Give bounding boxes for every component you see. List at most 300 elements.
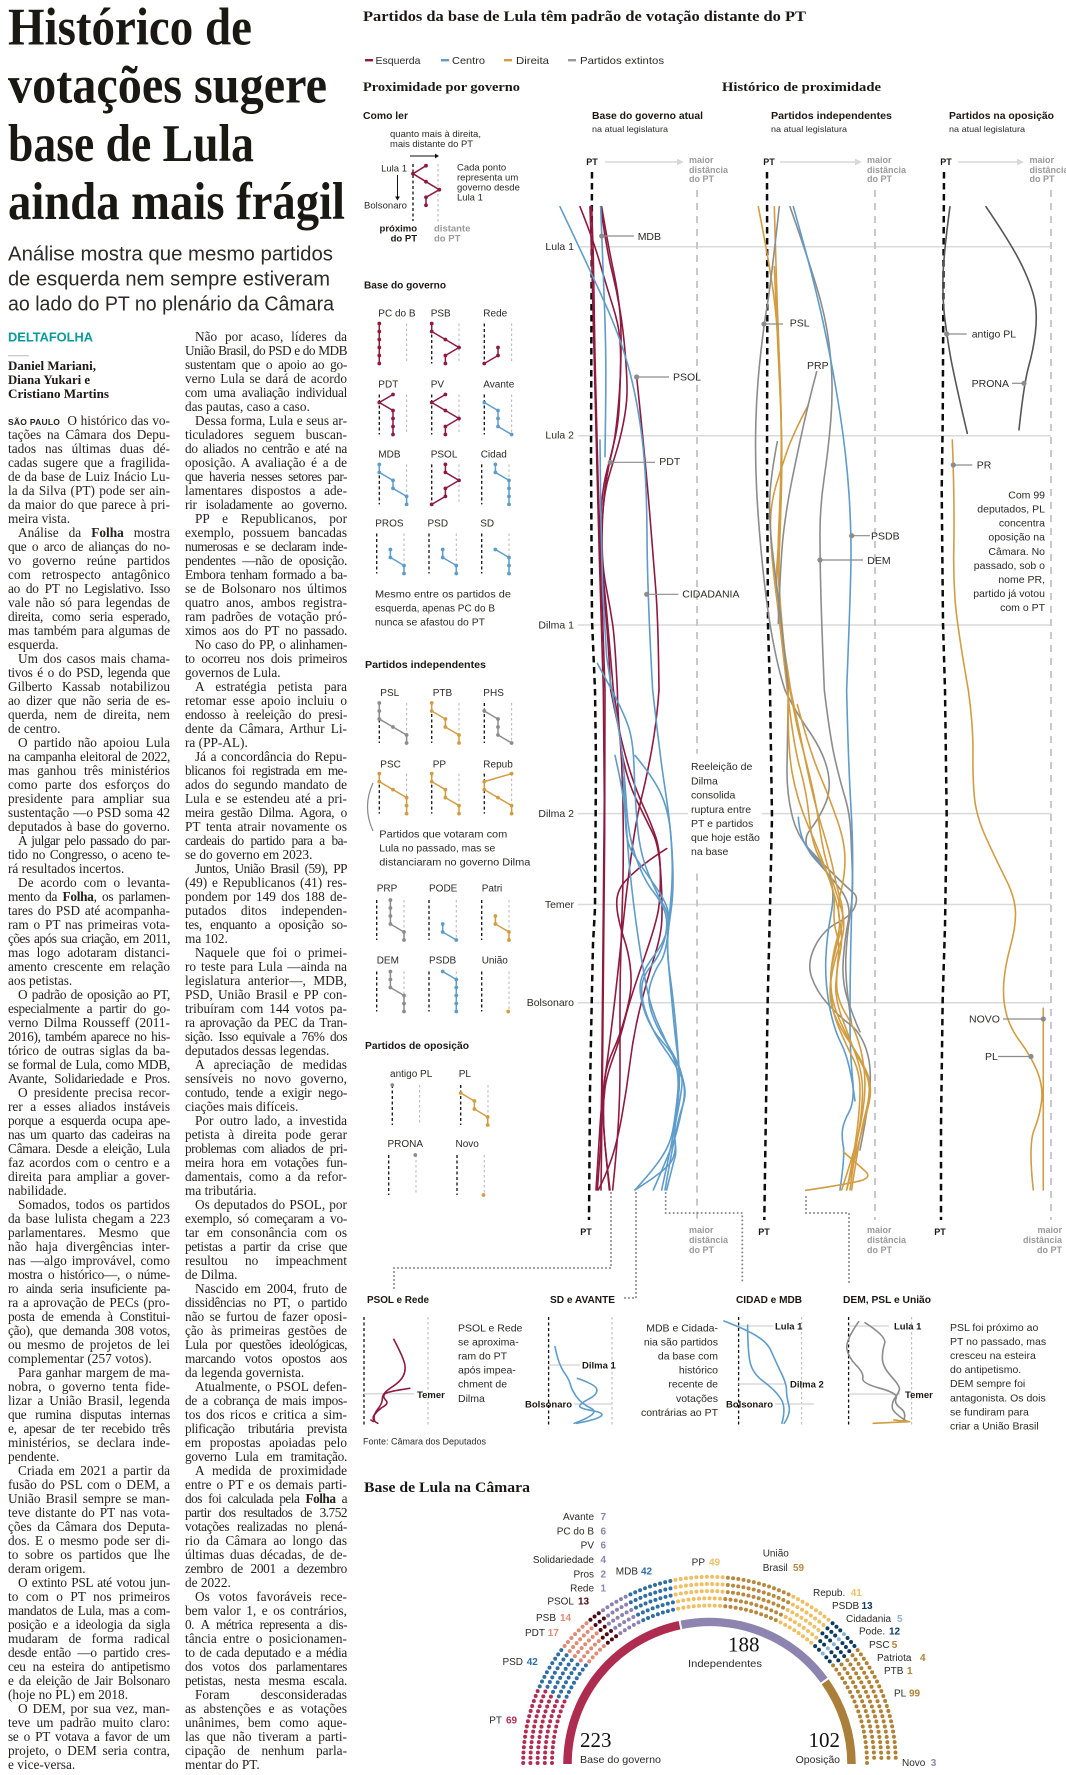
article text: column 2: exemplo, só começaram a vo-	[185, 1211, 347, 1226]
article text: column 1: De acordo com o levanta-	[18, 875, 170, 890]
article text: column 2: ma 102.	[185, 931, 228, 946]
detail panel: SD e AVANTE: votações	[676, 1393, 718, 1405]
article text: column 2: meira hora em votações fun-	[185, 1155, 347, 1170]
small multiple: PV	[431, 380, 459, 434]
article text: column 2: oposição. A avaliação é a de	[185, 455, 347, 470]
article text: column 1: como parte dos esforços do	[8, 777, 170, 792]
small multiple: PRP: PRP	[377, 884, 398, 894]
detail panel: DEM, PSL e União: criar a União Brasil	[950, 1420, 1039, 1432]
small multiple: Repub	[483, 760, 513, 814]
heading: Partidos independentes: Partidos independentes	[365, 659, 486, 671]
article text: column 1: mas também para algumas de	[8, 623, 170, 638]
small multiple: PRONA	[388, 1139, 423, 1195]
parliament: party labels: Cidadania	[846, 1614, 891, 1625]
parliament: party labels: PT	[489, 1716, 502, 1726]
article text: column 2: tância entre o posicionamen-	[185, 1631, 347, 1646]
annotation: Com 99 deputados: Câmara. No	[988, 546, 1045, 558]
article text: column 1: posta de emenda à Constitui-	[8, 1309, 170, 1324]
article text: column 2: votações realizadas no plená-	[185, 1519, 347, 1534]
small multiple: antigo PL: antigo PL	[390, 1069, 433, 1080]
article text: column 2: Dessa forma, Lula e seus ar-	[195, 413, 347, 428]
how to read diagram: representa um	[457, 172, 518, 184]
article text: column 1: posição e a ideologia da sigla	[8, 1617, 170, 1632]
article text: column 2: Não por acaso, líderes da	[195, 329, 347, 344]
article text: column 2: Atualmente, o PSOL defen-	[195, 1379, 347, 1394]
small multiple: Avante: Avante	[483, 380, 515, 390]
small multiple: PSDB	[429, 956, 457, 1012]
article text: column 2: tar em consonância com os	[185, 1225, 347, 1240]
article text: column 1	[8, 413, 170, 1772]
parliament: party labels: 5	[892, 1640, 898, 1651]
small multiple: PDT	[378, 380, 407, 434]
parliament: party labels: PSOL	[547, 1596, 574, 1608]
detail panel: PSOL e Rede: ram do PT	[458, 1350, 508, 1362]
detail panel: DEM, PSL e União: cresceu na esteira	[950, 1350, 1036, 1362]
detail panel: PSOL e Rede: PSOL e Rede	[458, 1322, 523, 1334]
article text: column 1: Para ganhar margem de ma-	[18, 1365, 170, 1380]
article text: column 1: tórico de outras siglas da ba-	[8, 1043, 170, 1058]
detail panel: DEM, PSL e União: do antipetismo.	[950, 1364, 1021, 1376]
article text: column 1: Análise da Folha mostra	[18, 525, 170, 540]
how to read diagram: quanto mais à direita,	[390, 129, 481, 140]
detail panel: PSOL e Rede: após impea-	[458, 1364, 516, 1376]
how to read diagram: mais distante do PT	[390, 139, 473, 150]
article text: column 2: dos foi calculada pela Folha a	[185, 1491, 347, 1506]
chart axes: PT and maior distância: distância	[689, 1235, 729, 1245]
article text: column 1: ou mesmo de projetos de lei	[8, 1337, 170, 1352]
article text: column 1: sustentação —o PSD soma 42	[8, 805, 170, 820]
article text: column 1: O DEM, por sua vez, man-	[18, 1701, 170, 1716]
article text: column 2: União Brasil, do PSD e do MDB	[185, 343, 347, 358]
article text: column 2: ção às primeiras gestões de	[185, 1323, 347, 1338]
detail panel: PSOL e Rede: Dilma	[458, 1393, 485, 1405]
article text: column 2: legislatura anterior—, MDB,	[185, 973, 347, 988]
parliament: party labels: 14	[560, 1613, 572, 1624]
parliament: party labels: 12	[889, 1626, 901, 1638]
article text: column 2: (49) e Republicanos (41) res-	[185, 875, 347, 890]
article text: column 1: vale não só para legendas de	[8, 595, 170, 610]
how to read diagram: Como ler	[363, 110, 408, 122]
article text: column 2: exemplo, possuem bancadas	[185, 525, 347, 540]
how to read diagram: governo desde	[457, 182, 520, 194]
article text: column 2: Lula e se estendeu até a pri-	[185, 791, 347, 806]
chart axes: PT and maior distância	[580, 155, 1066, 1255]
small multiple: PRONA: PRONA	[388, 1139, 423, 1150]
article text: column 1: da base lulista chegam a 223	[8, 1211, 170, 1226]
article text: column 1: ceu na esteira do antipetismo	[8, 1659, 170, 1674]
detail panel: SD e AVANTE: da base com	[658, 1350, 718, 1362]
parliament: party labels: 7	[600, 1512, 606, 1523]
parliament: coalition arcs	[568, 1622, 852, 1764]
parliament: party labels: PDT	[525, 1628, 545, 1639]
article text: column 1: complementar (257 votos).	[8, 1351, 152, 1366]
parliament: party labels	[489, 1512, 937, 1769]
column header: partidos independentes: na atual legislatura	[771, 124, 847, 134]
legend: Partidos extintos	[580, 55, 664, 67]
detail panel: DEM, PSL e União: Lula 1	[894, 1322, 922, 1332]
article text: column 1: to com o PT nos primeiros	[8, 1589, 170, 1604]
article text: column 2: quatro anos, ambos registra-	[185, 595, 347, 610]
parliament: party labels: 4	[920, 1653, 926, 1664]
annotation: Com 99 deputados: deputados, PL	[977, 504, 1045, 516]
parliament: party labels: 1	[907, 1666, 913, 1677]
chart axes: PT and maior distância: maior	[689, 1225, 714, 1235]
title: ainda mais frágil	[8, 173, 345, 231]
article text: column 2: unânimes, bem como aque-	[185, 1715, 347, 1730]
article text: column 2: deputados dessas legendas.	[185, 1043, 329, 1058]
parliament: party labels: PV	[581, 1540, 594, 1552]
chart axes: PT and maior distância: distância	[1023, 1235, 1063, 1245]
chart axes: PT and maior distância: do PT	[689, 174, 714, 184]
article text: column 2: ram padrões de votação pró-	[185, 609, 347, 624]
column header: base do governo atual: Base do governo atual	[592, 110, 703, 122]
detail panel: CIDAD e MDB: Lula 1	[775, 1322, 803, 1332]
article text: column 2: mentar do PT.	[185, 1757, 260, 1772]
detail panel: SD e AVANTE	[525, 1295, 719, 1425]
article text: column 1: Avante, Solidariedade e Pros.	[8, 1071, 170, 1086]
column header: base do governo atual: na atual legislatura	[592, 124, 668, 134]
title	[8, 0, 345, 231]
parliament: seat dots	[523, 1577, 896, 1763]
article text: column 1: mento da Folha, os parlamen-	[8, 889, 170, 904]
subtitle: ao lado do PT no plenário da Câmara	[8, 292, 335, 316]
subtitle: Análise mostra que mesmo partidos	[8, 242, 333, 266]
small multiple: PSL: PSL	[380, 688, 400, 699]
article text: column 2: to de cada deputado e a média	[185, 1645, 347, 1660]
chart axes: PT and maior distância: PT	[934, 1227, 946, 1237]
small multiple: PL: PL	[459, 1069, 471, 1080]
party callouts on lines: PDT	[659, 456, 681, 468]
party callouts on lines	[599, 231, 1046, 1063]
party callouts on lines: DEM	[867, 555, 891, 567]
article text: column 2: ro teste para Lula —ainda na	[185, 959, 347, 974]
small multiple: Rede	[483, 308, 512, 364]
parliament: party labels: Rede	[570, 1584, 594, 1594]
article text: column 1: deram origem.	[8, 1561, 86, 1576]
parliament: party labels: 59	[793, 1563, 805, 1574]
article text: column 2: plificação tributária prevista	[185, 1421, 347, 1436]
chart axes: PT and maior distância: maior	[867, 155, 892, 165]
article text: column 2: de a cobrança de mais impos-	[185, 1393, 347, 1408]
how to read diagram: distante	[434, 224, 470, 234]
column header: partidos independentes	[771, 110, 892, 134]
party callouts on lines: antigo PL	[972, 328, 1016, 340]
small multiple: Repub: Repub	[483, 760, 513, 771]
horizontal government lines and labels: Temer	[545, 899, 574, 911]
annotation: Reeleição de Dilma	[691, 761, 760, 858]
article text: column 1: Gilberto Kassab notabilizou	[8, 679, 170, 694]
article text: column 1: teve distante do PT nas vota-	[8, 1505, 170, 1520]
article text: column 2: últimas duas décadas, de de-	[185, 1547, 347, 1562]
party callouts on lines: PRP	[807, 360, 829, 372]
column header: partidos na oposição: na atual legislatura	[949, 124, 1025, 134]
detail panel: PSOL e Rede: chment de	[458, 1378, 507, 1390]
parliament: totals: 188	[728, 1632, 760, 1656]
party callouts on lines: NOVO	[969, 1014, 1000, 1026]
article text: column 1: de da base de Luiz Inácio Lu-	[8, 469, 170, 484]
article text: column 2: tos dos ricos e critica a sim-	[185, 1407, 347, 1422]
parliament: party labels: Brasil	[763, 1563, 788, 1574]
article text: column 1: SÃO PAULO O histórico das vo-	[8, 413, 170, 428]
article text: column 1: e, apesar de ter recebido três	[8, 1421, 170, 1436]
article text: column 2: entre o PT e os demais parti-	[185, 1477, 347, 1492]
legend: Esquerda	[376, 55, 421, 67]
detail panel: SD e AVANTE: recente de	[668, 1378, 718, 1390]
small multiple: PHS	[483, 688, 512, 743]
article text: column 1: O partido não apoiou Lula	[18, 735, 170, 750]
article text: column 2: problemas com aliados de pri-	[185, 1141, 347, 1156]
chart axes: PT and maior distância: do PT	[689, 1245, 714, 1255]
article text: column 1: faz acordos com o centro e a	[8, 1155, 170, 1170]
heading: Proximidade por governo: Proximidade por governo	[363, 79, 520, 94]
article text: column 2: putados ditos independen-	[185, 903, 347, 918]
parliament: party labels: 42	[527, 1657, 538, 1668]
article text: column 1: tados nas últimas duas dé-	[8, 441, 170, 456]
small multiple: União: União	[482, 956, 508, 966]
small multiple: MDB	[378, 449, 407, 504]
article text: column 1: ra a aprovação de PECs (pro-	[8, 1295, 170, 1310]
article text: column 2: contudo, tende a exigir nego-	[185, 1085, 347, 1100]
chart axes: PT and maior distância: do PT	[867, 1245, 892, 1255]
article text: column 1: rer a esses aliados instáveis	[8, 1099, 170, 1114]
article text: column 2: Juntos, União Brasil (59), PP	[195, 861, 347, 876]
small multiple: Novo	[456, 1139, 485, 1197]
article text: column 1: vo governo reúne partidos	[8, 553, 170, 568]
party callouts on lines: PR	[977, 460, 992, 472]
detail panel: DEM, PSL e União: PT no passado, mas	[950, 1336, 1046, 1348]
article text: column 1: mas ganhou três ministérios	[8, 763, 170, 778]
article text: column 1: mudaram de forma radical	[8, 1631, 170, 1646]
article text: column 2: ra (PP-AL).	[185, 735, 248, 750]
article text: column 1: O padrão de oposição ao PT,	[18, 987, 170, 1002]
small multiple: PSB: PSB	[431, 308, 451, 320]
how to read diagram: Cada ponto	[457, 162, 506, 174]
small multiple: PTB: PTB	[433, 688, 452, 699]
detail panel: PSOL e Rede: Temer	[417, 1390, 445, 1401]
small multiple: PROS	[375, 518, 404, 574]
article text: column 2: governos de Lula.	[185, 665, 281, 680]
party callouts on lines: PL	[985, 1051, 998, 1063]
article text: column 1: na campanha eleitoral de 2022,	[8, 749, 170, 764]
annotation: Com 99 deputados: partido já votou	[973, 588, 1045, 600]
small multiple: PROS: PROS	[375, 518, 404, 530]
parliament: party labels: 2	[600, 1570, 606, 1580]
small multiple: PSOL: PSOL	[431, 449, 458, 460]
article text: column 1: se o PT votava a favor de um	[8, 1729, 170, 1744]
article text: column 1: direita para ampliar a gover-	[8, 1169, 170, 1184]
article text: column 1: Somados, todos os partidos	[18, 1197, 170, 1212]
small multiple: PODE	[429, 884, 458, 940]
detail panel: CIDAD e MDB	[724, 1295, 824, 1425]
party callouts on lines: MDB	[638, 231, 661, 243]
small multiple: PSB	[431, 308, 459, 364]
horizontal government lines and labels: Lula 1	[545, 241, 574, 253]
article text: column 1: nobra, o governo tenta fide-	[8, 1379, 170, 1394]
small multiple: PRP	[377, 884, 404, 940]
article text: column 2: zembro de 2001 a dezembro	[185, 1561, 347, 1576]
parliament: party labels: Novo	[902, 1758, 926, 1769]
annotation: Reeleição de Dilma: PT e partidos	[691, 818, 753, 830]
horizontal government lines and labels: Dilma 2	[538, 808, 574, 820]
party callouts on lines: PSDB	[871, 530, 900, 542]
article text: column 2: rio da Câmara ao longo das	[185, 1533, 347, 1548]
detail panel: DEM, PSL e União: antagonista. Os dois	[950, 1392, 1046, 1404]
chart axes: PT and maior distância: PT	[586, 157, 598, 167]
article text: column 1: lizar a União Brasil, legenda	[8, 1393, 170, 1408]
article text: column 2: de 2022.	[185, 1575, 231, 1590]
parliament: party labels: 13	[578, 1596, 590, 1608]
article text: column 1: parlamentares. Mesmo que	[8, 1225, 170, 1240]
article text: column 2: A estratégia petista para	[195, 679, 347, 694]
small multiple: MDB: MDB	[378, 449, 401, 460]
article text: column 2: resultou no impeachment	[185, 1253, 347, 1268]
chart axes: PT and maior distância: PT	[580, 1227, 592, 1237]
bracket	[368, 783, 373, 831]
article text: column 1: que rumina disputas internas	[8, 1407, 170, 1422]
note: partidos que votaram com Lula: distanciaram no governo Dilma	[379, 858, 531, 868]
detail panel: SD e AVANTE: nia são partidos	[644, 1336, 718, 1348]
chart axes: PT and maior distância: PT	[758, 1227, 770, 1237]
article text: column 2: das pautas, caso a caso.	[185, 399, 310, 414]
article text: column 2: Por outro lado, a investida	[195, 1113, 347, 1128]
article text: column 2: Os votos favoráveis rece-	[195, 1589, 347, 1604]
chart: party lines, upper half	[560, 207, 1036, 690]
article text: column 2: do aliados no centrão e até na	[185, 441, 347, 456]
parliament: party labels: PSDB	[832, 1601, 860, 1612]
detail panel: SD e AVANTE: MDB e Cidada-	[646, 1322, 718, 1334]
parliament: party labels: PSD	[502, 1657, 523, 1668]
article text: column 2: ma tributária.	[185, 1183, 257, 1198]
article text: column 2: ciações mais difíceis.	[185, 1099, 298, 1114]
article text: column 2: não se furtou de fazer oposi-	[185, 1309, 347, 1324]
article text: column 2: PP e Republicanos, por	[195, 511, 347, 526]
small multiple: Rede: Rede	[483, 308, 508, 320]
annotation: Reeleição de Dilma: Reeleição de	[691, 761, 752, 773]
article text: column 1: ção), que demanda 308 votos,	[8, 1323, 170, 1338]
article text: column 1: nabilidade.	[8, 1183, 67, 1198]
article text: column 2: verno Lula se dará de acordo	[185, 371, 347, 386]
article text: column 1: especialmente a partir do go-	[8, 1001, 170, 1016]
article text: column 2: governo Lula em tramitação.	[185, 1449, 347, 1464]
small multiple: SD: SD	[480, 518, 494, 530]
detail panel: DEM, PSL e União: se fundiram para	[950, 1406, 1029, 1418]
article text: column 2: se do governo em 2023.	[185, 847, 312, 862]
heading: Partidos de oposição: Partidos de oposição	[365, 1040, 469, 1052]
annotation: Com 99 deputados: oposição na	[988, 532, 1045, 544]
article text: column 2: pendentes —não de oposição.	[185, 553, 347, 568]
how to read diagram: Lula 1	[381, 164, 407, 174]
article text: column 2: dissidências no PT, o partido	[185, 1295, 347, 1310]
article text: column 1: se formal de Lula, como MDB,	[8, 1057, 170, 1072]
annotation: Reeleição de Dilma: ruptura entre	[691, 804, 751, 816]
horizontal government lines and labels: Bolsonaro	[527, 997, 574, 1009]
article text: column 2: Naquele que foi o primei-	[195, 945, 347, 960]
chart: party lines, lower half	[596, 690, 1043, 1190]
article text: column 2: Nascido em 2004, fruto de	[195, 1281, 347, 1296]
column header: partidos na oposição	[949, 110, 1054, 134]
parliament: party labels: 6	[600, 1540, 606, 1552]
chart axes: PT and maior distância: do PT	[1030, 174, 1055, 184]
note: esquerda: nunca se afastou do PT	[375, 618, 485, 628]
article text: column 1: ro ainda seria insuficiente pa-	[8, 1281, 170, 1296]
chart axes: PT and maior distância: do PT	[867, 174, 892, 184]
parliament: party labels: 6	[600, 1526, 606, 1538]
article text: column 2: com uma avaliação individual	[185, 385, 347, 400]
article text: column 2: rir isoladamente ao governo.	[185, 497, 347, 512]
article text: column 2: dente da Câmara, Arthur Li-	[185, 721, 347, 736]
note: esquerda: esquerda, apenas PC do B	[375, 604, 495, 614]
legend: Centro	[452, 55, 485, 67]
parliament: party labels: Pros	[573, 1570, 594, 1580]
article text: column 2: numerosas e se declaram inde-	[185, 539, 347, 554]
article text: column 1: Câmara. Desde a eleição, Lula	[8, 1141, 170, 1156]
detail panel: CIDAD e MDB: CIDAD e MDB	[736, 1295, 802, 1306]
article text: column 2: petista à direita pode gerar	[185, 1127, 347, 1142]
article text: column 1: esquerda.	[8, 637, 59, 652]
annotation: Com 99 deputados: concentra	[999, 518, 1045, 530]
article text: column 2: pondem por 149 dos 188 de-	[185, 889, 347, 904]
small multiple: PP	[432, 760, 459, 814]
small multiple: PHS: PHS	[483, 688, 504, 699]
small multiple: PSDB: PSDB	[429, 956, 457, 966]
detail panel: SD e AVANTE: histórico	[679, 1364, 718, 1376]
chart title: Partidos da base de Lula têm padrão de votação distante do PT	[363, 9, 806, 25]
article text: column 1: A julgar pelo passado do par-	[18, 833, 170, 848]
byline	[8, 356, 109, 401]
parliament: totals: Oposição	[796, 1754, 840, 1766]
chart axes: PT and maior distância: maior	[1037, 1225, 1062, 1235]
parliament: party labels: Repub.	[813, 1588, 845, 1599]
article text: column 1: ao do PT no Legislativo. Isso	[8, 581, 170, 596]
small multiple: SD	[480, 518, 509, 574]
article text: column 1: aos petistas.	[8, 973, 72, 988]
horizontal government lines and labels: Lula 2	[545, 430, 574, 442]
parliament: party labels: Solidariedade	[533, 1555, 594, 1566]
detail panel: SD e AVANTE: Bolsonaro	[525, 1400, 572, 1410]
detail panel: SD e AVANTE: contrárias ao PT	[641, 1407, 719, 1419]
parliament: totals	[580, 1632, 840, 1766]
heading: Base do governo: Base do governo	[364, 280, 446, 292]
article text: column 1: não haja divergências inter-	[8, 1239, 170, 1254]
parliament: party labels: 1	[600, 1584, 606, 1594]
small multiple: PP: PP	[433, 760, 446, 771]
small multiple: PV: PV	[431, 380, 444, 390]
small multiple: Avante	[483, 380, 515, 434]
legend	[365, 55, 664, 67]
article text: column 1: ao dizer que não seria de es-	[8, 693, 170, 708]
chart axes: PT and maior distância: PT	[763, 157, 775, 167]
article text: column 1: com retrospecto antagônico	[8, 567, 170, 582]
detail panel: CIDAD e MDB: Bolsonaro	[726, 1400, 773, 1410]
subtitle	[8, 242, 335, 316]
article text: column 1: mostra o histórico—, o núme-	[8, 1267, 170, 1282]
dotted connectors to detail panels	[394, 1193, 849, 1298]
parliament: totals: Independentes	[688, 1658, 762, 1670]
article text: column 1: direita, como seria esperado,	[8, 609, 170, 624]
parliament: party labels: 4	[600, 1555, 606, 1566]
note: partidos que votaram com Lula: Lula no passado, mas se	[379, 844, 496, 854]
parliament: party labels: 17	[548, 1628, 559, 1639]
article text: column 1: fusão do PSL com o DEM, a	[8, 1477, 170, 1492]
small multiple: PC do B: PC do B	[378, 308, 416, 320]
article text: column 1: (hoje no PL) em 2018.	[8, 1687, 128, 1702]
article text: column 2: se de Bolsonaro nos últimos	[185, 581, 347, 596]
parliament: party labels: 99	[909, 1688, 921, 1700]
article text: column 1: União Brasil sempre se man-	[8, 1491, 170, 1506]
article text: column 1: mandatos de Lula, mas a com-	[8, 1603, 170, 1618]
detail panel: DEM, PSL e União	[843, 1295, 1046, 1432]
article text: column 2: damentais, como a da refor-	[185, 1169, 347, 1184]
